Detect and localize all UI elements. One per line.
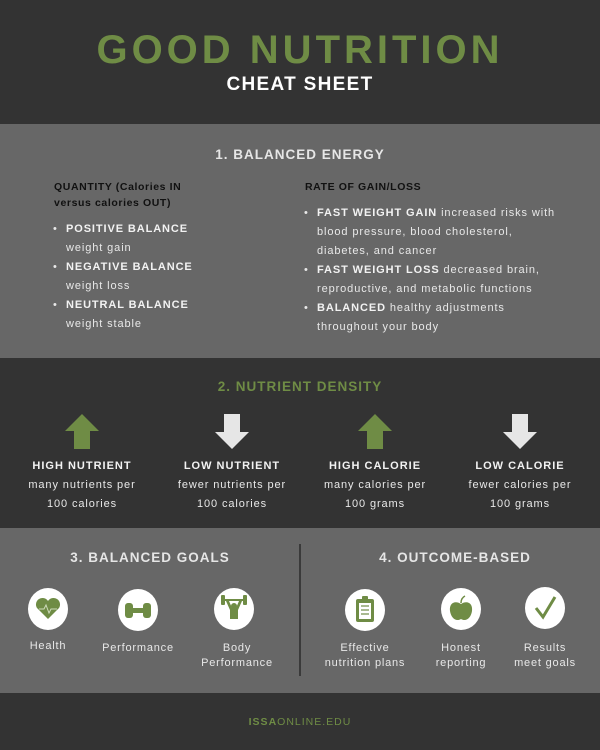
icon: check: [525, 587, 565, 629]
header: [0, 0, 600, 124]
quantity column: •: [53, 299, 58, 311]
quantity column: [53, 181, 193, 330]
rate column: RATE OF GAIN/LOSS: [305, 181, 421, 193]
subtitle: CHEAT SHEET: [227, 74, 373, 95]
panel: goals and outcomes: [0, 528, 600, 693]
quantity column: weight gain: [66, 242, 132, 254]
label: performance: Performance: [102, 642, 174, 654]
title: GOOD NUTRITION: [96, 28, 504, 72]
icon: down arrow: [215, 414, 249, 449]
icon: down arrow: [503, 414, 537, 449]
item: low calorie: [468, 414, 572, 510]
heading 2: 2. NUTRIENT DENSITY: [218, 379, 382, 394]
item: high calorie: HIGH CALORIE: [329, 460, 421, 472]
icon: clipboard: [345, 589, 385, 631]
footer: [0, 693, 600, 750]
quantity column: •: [53, 261, 58, 273]
item: low nutrient: fewer nutrients per: [178, 479, 286, 491]
item: high calorie: 100 grams: [345, 498, 405, 510]
item: high nutrient: 100 calories: [47, 498, 117, 510]
item: high calorie: many calories per: [324, 479, 426, 491]
quantity column: NEUTRAL BALANCE: [66, 299, 189, 311]
label: body performance: Body: [223, 642, 251, 654]
item: high nutrient: HIGH NUTRIENT: [32, 460, 132, 472]
quantity column: versus calories OUT): [54, 197, 171, 209]
quantity column: •: [53, 223, 58, 235]
rate column: FAST WEIGHT GAIN increased risks with blood pressure, blood cholesterol, diabetes, and cancer: [317, 207, 555, 257]
rate column: •: [304, 264, 309, 276]
item: low nutrient: 100 calories: [197, 498, 267, 510]
rate column: •: [304, 302, 309, 314]
quantity column: POSITIVE BALANCE: [66, 223, 188, 235]
footer url: ISSAONLINE.EDU: [249, 716, 351, 728]
rate column: [304, 181, 555, 333]
icon: apple: [441, 588, 481, 630]
icon: heart: [28, 588, 68, 630]
quantity column: QUANTITY (Calories IN: [54, 181, 181, 193]
label: honest reporting: reporting: [436, 657, 486, 669]
icon: dumbbell: [118, 589, 158, 631]
label: effective nutrition plans: nutrition plans: [325, 657, 405, 669]
label: honest reporting: [436, 642, 486, 669]
item: low calorie: 100 grams: [490, 498, 550, 510]
item: high calorie: [324, 414, 426, 510]
item: low nutrient: LOW NUTRIENT: [184, 460, 280, 472]
rate column: FAST WEIGHT LOSS decreased brain, reproductive, and metabolic functions: [317, 264, 540, 295]
rate column: BALANCED healthy adjustments throughout your body: [317, 302, 505, 333]
item: low calorie: fewer calories per: [468, 479, 572, 491]
label: body performance: Performance: [201, 657, 273, 669]
quantity column: NEGATIVE BALANCE: [66, 261, 193, 273]
label: effective nutrition plans: [325, 642, 405, 669]
quantity column: weight loss: [66, 280, 130, 292]
item: low nutrient: [178, 414, 286, 510]
quantity column: weight stable: [66, 318, 142, 330]
label: results meet goals: [514, 642, 576, 669]
label: health: Health: [30, 640, 66, 652]
label: results meet goals: Results: [524, 642, 566, 654]
item: high nutrient: many nutrients per: [28, 479, 136, 491]
label: body performance: [201, 642, 273, 669]
icon: weightlifter: [214, 588, 254, 630]
item: high nutrient: [28, 414, 136, 510]
label: honest reporting: Honest: [441, 642, 481, 654]
icon: up arrow: [358, 414, 392, 449]
item: low calorie: LOW CALORIE: [475, 460, 565, 472]
panel: balanced energy: [0, 124, 600, 358]
rate column: •: [304, 207, 309, 219]
panel: nutrient density: [0, 358, 600, 528]
label: effective nutrition plans: Effective: [340, 642, 390, 654]
icon: up arrow: [65, 414, 99, 449]
heading 4: 4. OUTCOME-BASED: [379, 550, 531, 565]
label: results meet goals: meet goals: [514, 657, 576, 669]
heading 1: 1. BALANCED ENERGY: [215, 147, 385, 162]
heading 3: 3. BALANCED GOALS: [70, 550, 230, 565]
